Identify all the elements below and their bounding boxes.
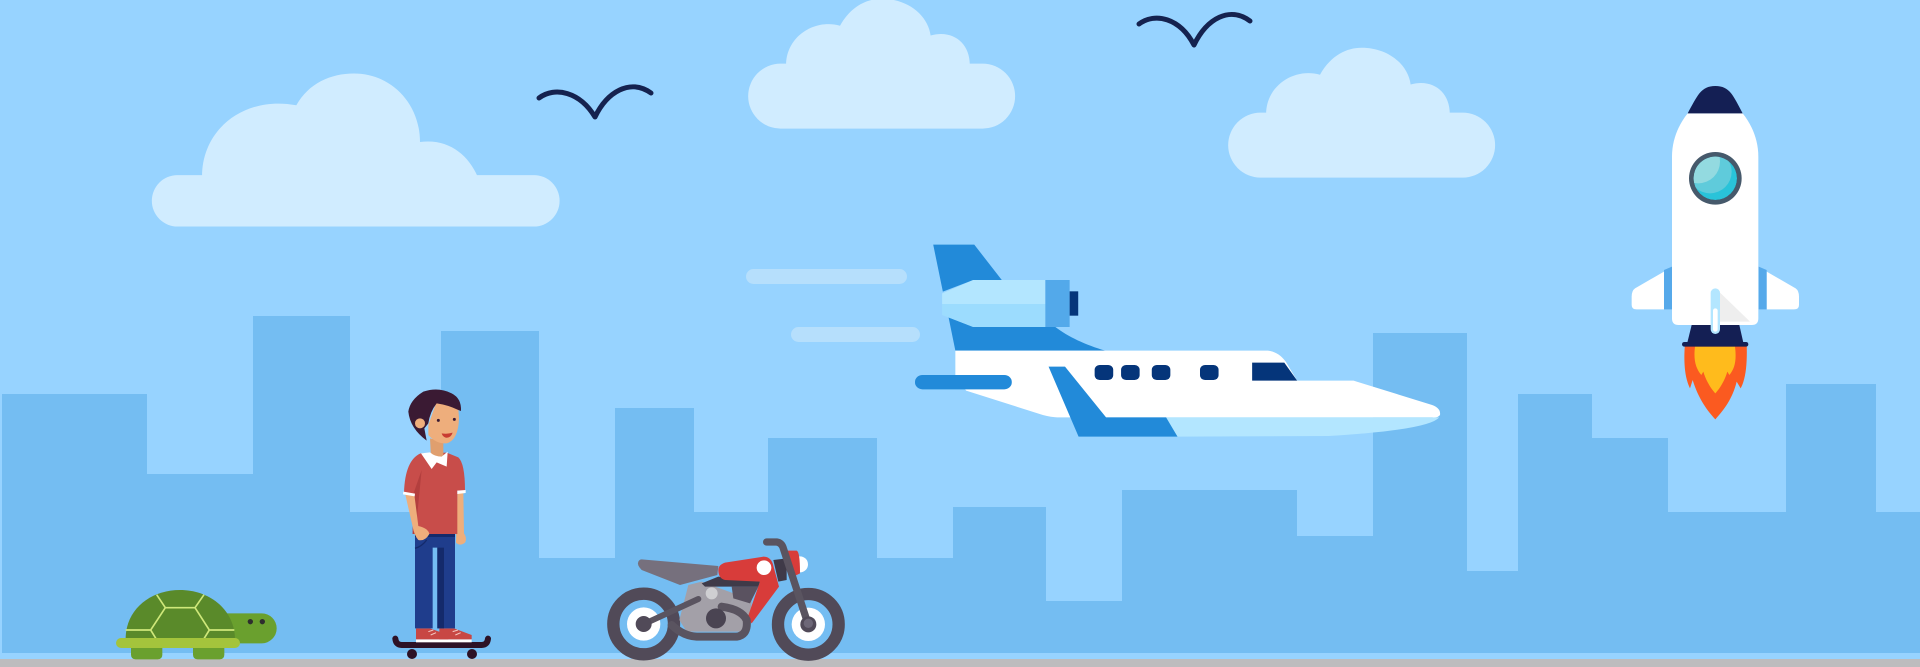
rocket xyxy=(1632,86,1799,419)
bird right xyxy=(1139,14,1250,45)
airplane xyxy=(915,245,1440,437)
cloud right xyxy=(1228,48,1495,178)
bird left xyxy=(539,87,651,117)
turtle xyxy=(116,590,277,659)
cloud top centre xyxy=(748,0,1015,129)
motorcycle xyxy=(613,542,839,655)
ground xyxy=(0,653,1920,667)
city skyline xyxy=(2,316,1920,667)
cloud left xyxy=(152,73,560,227)
speed lines xyxy=(746,269,920,342)
boy on skateboard xyxy=(395,390,488,659)
